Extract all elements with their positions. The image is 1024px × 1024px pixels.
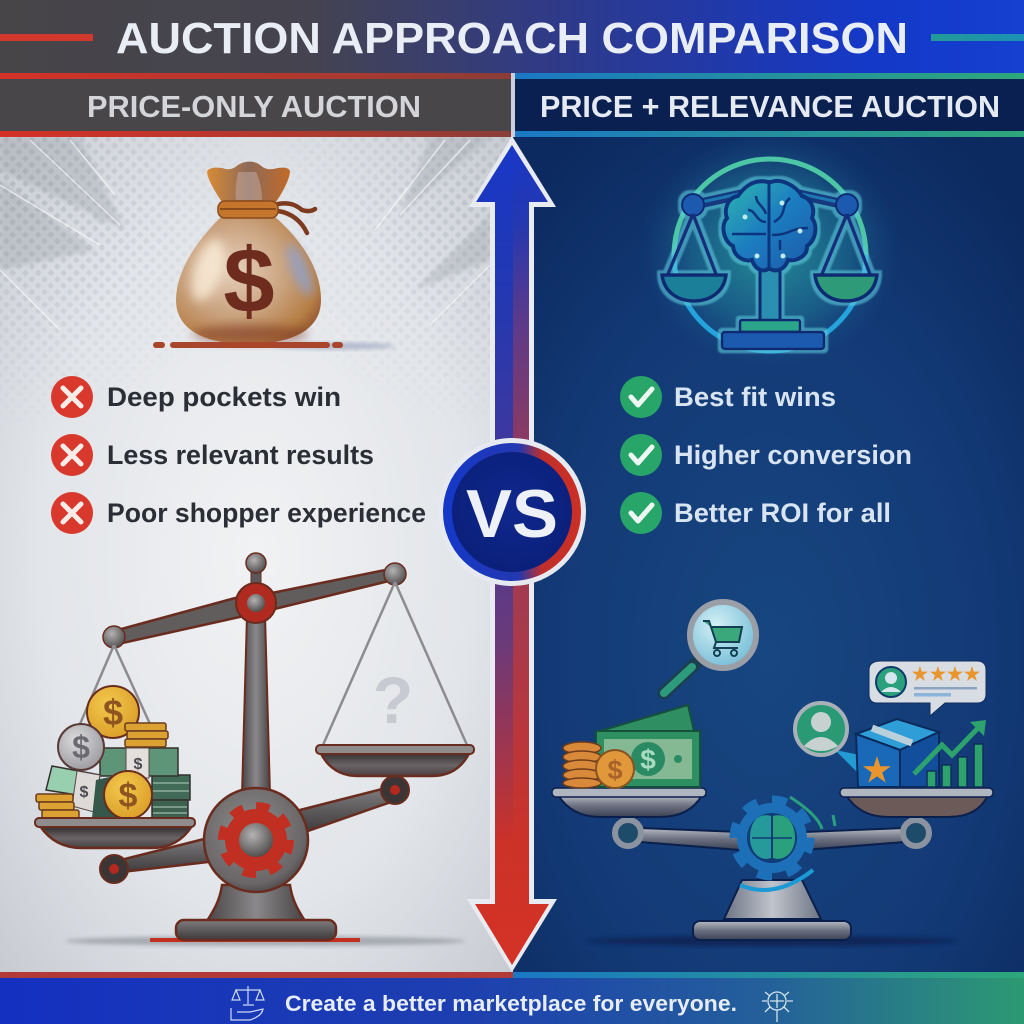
product box: ★ (863, 752, 892, 788)
banknotes and coins (563, 705, 700, 788)
badge: vs (438, 438, 586, 586)
icon: money bag (153, 162, 395, 350)
illustration: scale tipped by money (35, 553, 474, 946)
post and base (760, 262, 780, 324)
shopper avatar (795, 703, 860, 775)
icon: brain balance scale (640, 132, 900, 368)
money pile: $ (119, 777, 138, 815)
beam (114, 594, 262, 644)
left pan (40, 826, 192, 848)
panel: right background (513, 137, 1024, 973)
footer band (0, 978, 1024, 1024)
review bubble: ★ (964, 664, 981, 684)
left pan (558, 795, 702, 817)
gear wheel (204, 788, 308, 892)
icon: brain magnifier (762, 992, 793, 1022)
money pile: $ (72, 729, 90, 765)
item: less relevant results (51, 434, 374, 476)
heading: price-only auction: PRICE-ONLY AUCTION (87, 89, 421, 124)
icon: scale on hand (231, 986, 264, 1020)
bottom strips (0, 972, 1024, 978)
arm (640, 828, 740, 850)
beam (693, 188, 847, 205)
review bubble: ★ (930, 664, 947, 684)
review bubble: ★ (947, 664, 964, 684)
tagline: Create a better marketplace for everyone. (285, 991, 737, 1016)
heading: price-only auction (0, 73, 511, 137)
growth chart (914, 720, 986, 787)
list: price-only drawbacks (51, 376, 426, 534)
column (242, 615, 270, 795)
list: price + relevance benefits (620, 376, 912, 534)
magnifier with cart (664, 602, 756, 693)
money pile: $ (134, 756, 143, 773)
title: AUCTION APPROACH COMPARISON (116, 15, 908, 63)
strings (668, 214, 870, 274)
review bubble (869, 661, 986, 716)
item: best fit wins (620, 376, 836, 418)
money pile: $ (80, 784, 89, 801)
panel: left background (0, 137, 513, 973)
right pan (846, 795, 988, 817)
item: best fit wins: Best fit wins (674, 382, 836, 412)
review bubble: ★ (912, 664, 929, 684)
banknotes and coins: $ (607, 755, 623, 785)
heading: price + relevance auction: PRICE + RELEVANCE AUCTION (540, 89, 1000, 124)
brain gear (735, 797, 835, 890)
base (724, 880, 821, 919)
icon: money bag: $ (223, 230, 275, 332)
item: poor shopper experience: Poor shopper experience (107, 498, 426, 528)
strings (80, 582, 467, 745)
base (207, 885, 305, 921)
item: deep pockets win (51, 376, 341, 418)
item: poor shopper experience (51, 492, 426, 534)
heading: price + relevance auction (511, 73, 1024, 137)
title band (0, 0, 1024, 73)
product box (856, 719, 939, 788)
arrow: vertical double-headed divider (467, 136, 557, 972)
item: less relevant results: Less relevant results (107, 440, 374, 470)
money pile: $ (103, 692, 123, 733)
money pile (36, 686, 190, 819)
pans (662, 275, 726, 301)
item: deep pockets win: Deep pockets win (107, 382, 341, 412)
badge: vs: VS (466, 476, 558, 552)
item: better roi for all: Better ROI for all (674, 498, 891, 528)
item: higher conversion (620, 434, 912, 476)
lower arms (113, 838, 208, 873)
right pan (320, 752, 470, 776)
question mark: ? (373, 663, 413, 737)
item: better roi for all (620, 492, 891, 534)
item: higher conversion: Higher conversion (674, 440, 912, 470)
banknotes and coins: $ (640, 744, 656, 775)
illustration: balanced scale with relevance (552, 602, 993, 946)
brain (723, 181, 815, 270)
